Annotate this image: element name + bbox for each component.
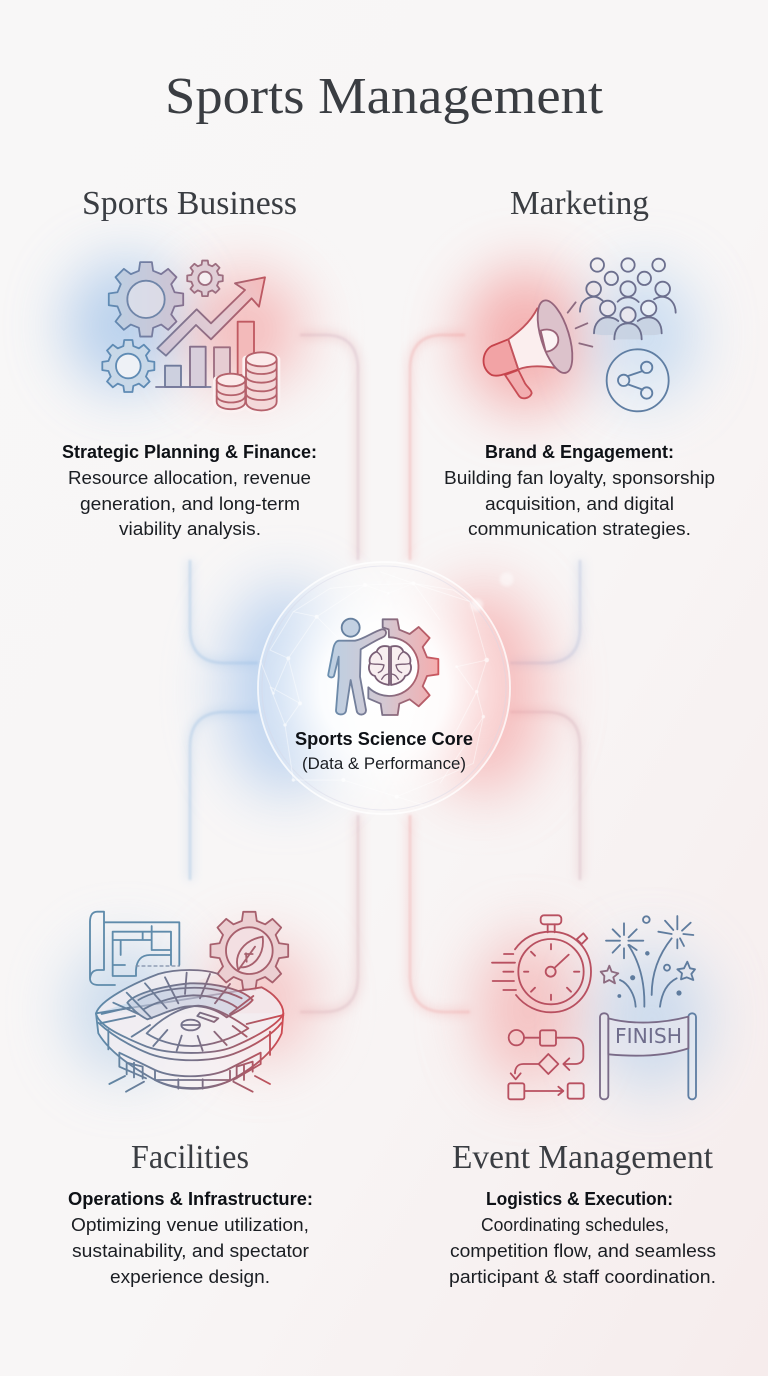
description: strategic planning and finance: Strategic Planning & Finance: [62,442,317,462]
panel: sports science core [223,561,545,815]
core label: Sports Science Core [295,729,473,749]
description: logistics and execution: Coordinating schedules, [481,1214,669,1235]
description: strategic planning and finance: Resource allocation, revenue [68,467,311,488]
panel: event management [449,915,716,1287]
description: logistics and execution: participant & staff coordination. [449,1266,716,1287]
description: brand and engagement: Building fan loyalty, sponsorship [444,467,715,488]
panel: sports business [62,185,317,539]
sphere network [260,572,513,805]
heading: facilities: Facilities [131,1139,249,1176]
icon: person with brain gear [328,619,438,715]
icon: gears, growth chart and coins [65,259,303,410]
title: Sports Management [165,68,604,125]
description: strategic planning and finance: generation, and long-term [80,493,300,514]
description: operations and infrastructure: Optimizing venue utilization, [71,1214,309,1235]
description: logistics and execution [449,1189,716,1287]
icon: stadium, blueprint and leaf gear [67,912,314,1092]
description: strategic planning and finance [62,442,317,539]
connector lines [190,335,580,1012]
icon: stopwatch, fireworks, flow chart and finish banner [476,915,708,1099]
description: operations and infrastructure: sustainability, and spectator [72,1240,309,1261]
description: brand and engagement: acquisition, and digital [485,493,674,514]
sphere glow [223,561,545,815]
panel: marketing [444,185,715,539]
description: strategic planning and finance: viability analysis. [119,518,261,539]
heading: sports business: Sports Business [82,185,297,222]
heading: event management: Event Management [452,1139,714,1176]
description: brand and engagement [444,442,715,539]
description: brand and engagement: communication strategies. [468,518,691,539]
description: logistics and execution: competition flow, and seamless [450,1240,716,1261]
core label: (Data & Performance) [302,755,466,773]
description: operations and infrastructure: Operations & Infrastructure: [68,1189,313,1209]
description: operations and infrastructure: experience design. [110,1266,270,1287]
description: logistics and execution: Logistics & Execution: [486,1189,673,1209]
description: brand and engagement: Brand & Engagement: [485,442,674,462]
panel: facilities [67,912,314,1287]
core label [295,729,473,773]
heading: marketing: Marketing [510,185,649,222]
finish banner text: FINISH [615,1024,682,1048]
description: operations and infrastructure [68,1189,313,1287]
icon: megaphone, crowd and share [463,258,697,412]
